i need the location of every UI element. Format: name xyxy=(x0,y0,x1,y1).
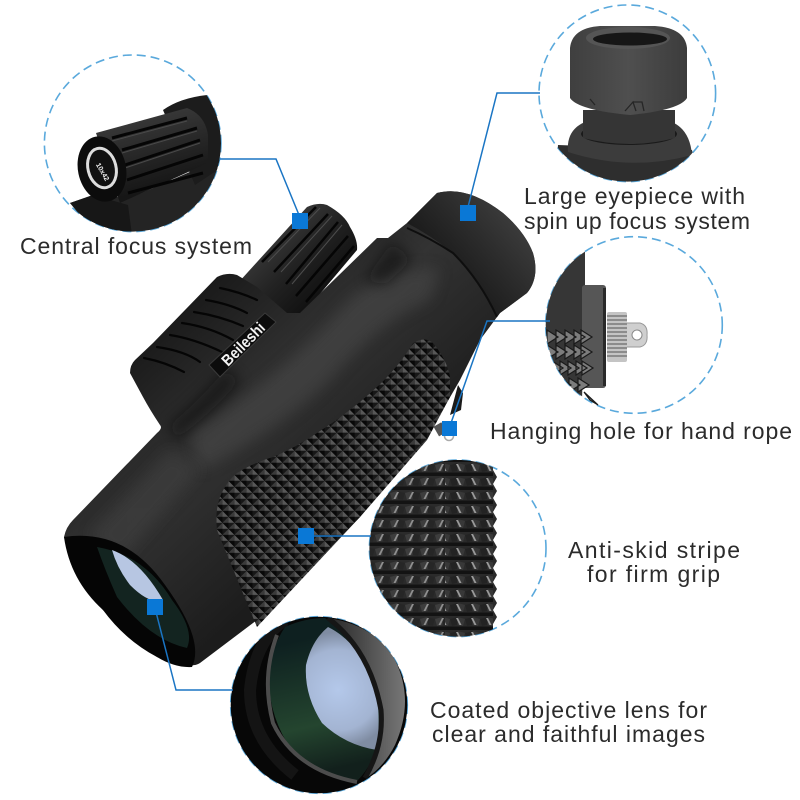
body highlight xyxy=(196,272,434,461)
end cap badge xyxy=(86,146,118,190)
monocular body xyxy=(64,185,545,667)
label: central focus system: Central focus system xyxy=(20,233,252,259)
texture swatch right xyxy=(445,460,493,637)
label: coated objective lens xyxy=(430,697,707,747)
leader: lens xyxy=(156,612,233,690)
marker: central focus xyxy=(292,213,308,229)
label: anti-skid stripe xyxy=(568,537,740,587)
spike rows xyxy=(547,330,598,405)
label: hanging hole: Hanging hole for hand rope xyxy=(490,418,792,444)
knob mount xyxy=(163,95,225,185)
ridged thumb rest xyxy=(144,288,257,372)
rubber cup xyxy=(570,26,687,115)
label: large eyepiece: Large eyepiece with xyxy=(524,183,745,209)
light blue reflection xyxy=(306,627,379,750)
dark lens housing xyxy=(230,615,410,795)
label: coated objective lens: Coated objective lens for xyxy=(430,697,707,723)
hanging plate behind body xyxy=(450,385,463,415)
objective lens xyxy=(64,536,195,667)
marker: hanging hole xyxy=(442,421,457,436)
inset: coated lens xyxy=(230,615,410,795)
cup opening xyxy=(593,32,667,46)
eyepiece section xyxy=(407,191,536,317)
label: coated objective lens: clear and faithful images xyxy=(432,721,705,747)
main barrel xyxy=(64,191,535,665)
inset: grip texture xyxy=(369,460,546,637)
lens coating highlight xyxy=(112,550,163,601)
end cap badge: 10x42 xyxy=(94,162,110,183)
inset: hanging hole xyxy=(540,237,722,413)
knurled screw xyxy=(607,312,627,362)
knob cylinder xyxy=(96,108,208,203)
leader: hanging hole xyxy=(451,321,550,423)
knurled grip xyxy=(216,340,450,627)
serrated edge xyxy=(493,470,497,624)
inset: eyepiece xyxy=(539,5,716,190)
leader: grip xyxy=(306,535,371,537)
focus wheel xyxy=(238,204,357,320)
inner ring xyxy=(268,635,357,782)
dark plate xyxy=(546,252,585,396)
lens glass xyxy=(97,547,189,648)
alignment marks xyxy=(590,99,644,111)
inset: central focus xyxy=(44,55,225,240)
marker: lens xyxy=(147,599,163,615)
neck xyxy=(583,110,675,144)
texture swatch left xyxy=(369,460,445,637)
outer rim xyxy=(328,618,405,777)
leader: central focus xyxy=(220,159,299,215)
label: anti-skid stripe: Anti-skid stripe xyxy=(568,537,740,563)
green coating xyxy=(268,618,381,780)
leader: eyepiece xyxy=(468,93,540,207)
side block xyxy=(582,285,606,388)
cup rim xyxy=(586,27,670,49)
knob end cap xyxy=(78,136,126,202)
base plate xyxy=(70,160,220,232)
label: anti-skid stripe: for firm grip xyxy=(587,561,720,587)
brand nameplate: Beileshi xyxy=(219,320,269,370)
base collar xyxy=(568,122,692,163)
marker: eyepiece xyxy=(460,205,476,221)
hanging tab xyxy=(625,323,647,347)
hanging hole screw xyxy=(434,422,454,440)
body below eyepiece xyxy=(558,145,692,182)
label: large eyepiece: spin up focus system xyxy=(524,208,750,234)
label: large eyepiece xyxy=(524,183,750,234)
marker: grip xyxy=(298,528,314,544)
